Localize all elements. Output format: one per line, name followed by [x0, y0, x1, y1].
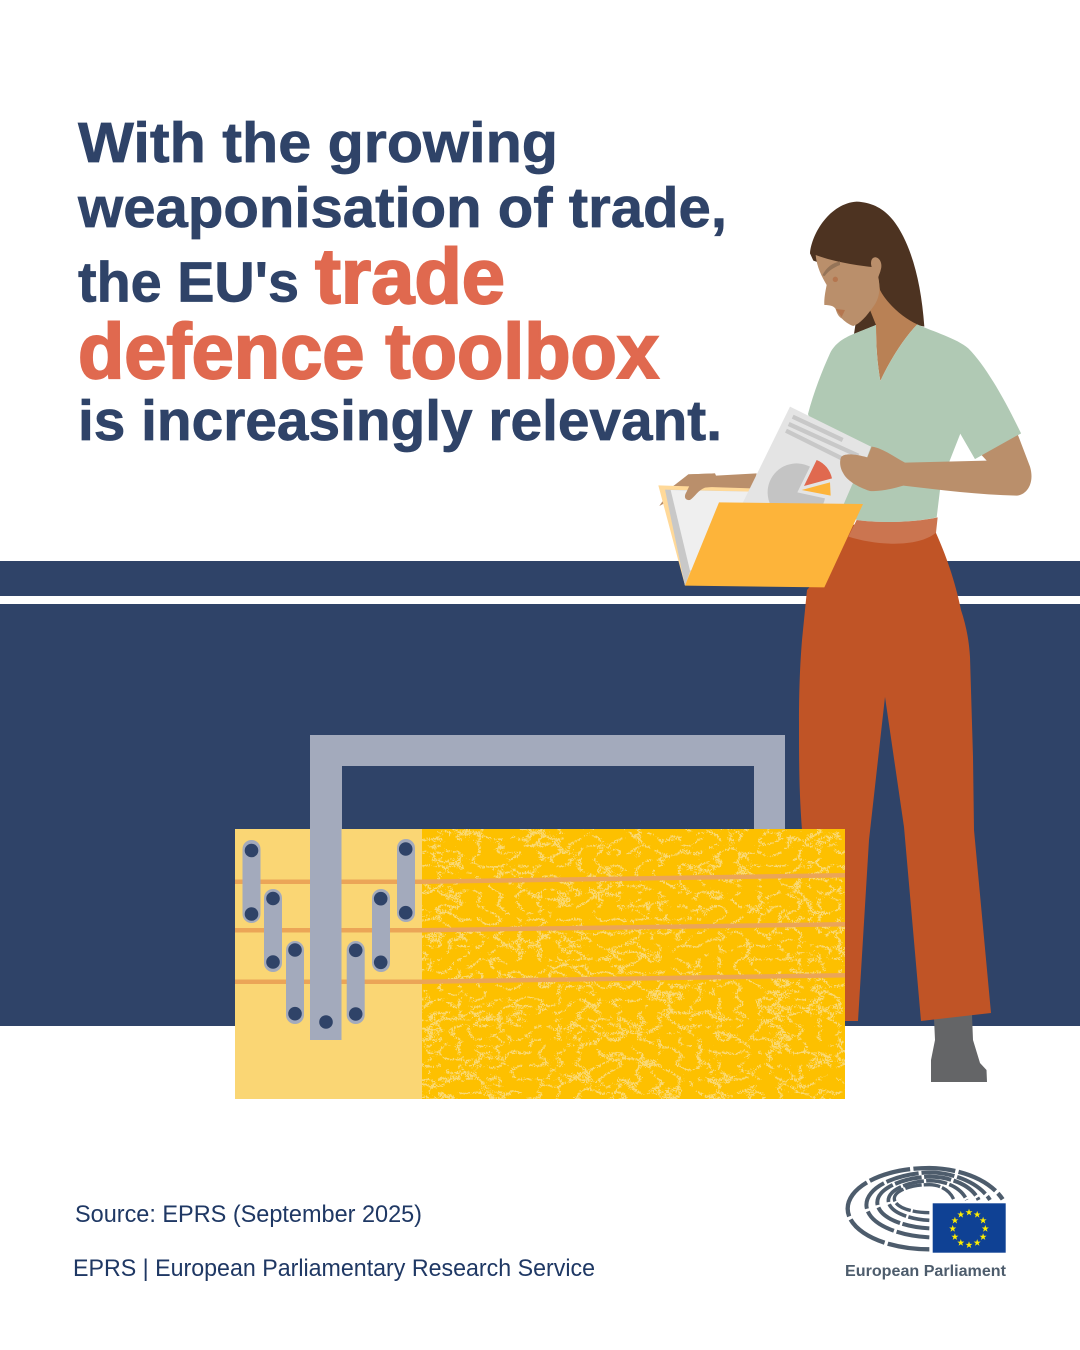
heading: defence toolbox	[78, 307, 659, 395]
heading: is increasingly relevant.	[78, 389, 722, 453]
document text lines	[786, 417, 858, 458]
eyebrow	[822, 261, 840, 276]
heading: weaponisation of trade,	[77, 176, 727, 240]
thumb	[673, 473, 716, 500]
latch bolts	[245, 842, 413, 1029]
boot	[931, 1015, 987, 1082]
eye	[833, 277, 838, 282]
trousers	[799, 520, 991, 1021]
EU flag	[933, 1203, 1006, 1253]
neck	[870, 277, 917, 381]
background bands	[0, 561, 1080, 1026]
source text: Source: EPRS (September 2025)	[75, 1201, 422, 1228]
toolbox left panel	[235, 829, 422, 1099]
logo wordmark: European Parliament	[845, 1263, 1007, 1280]
arm and hand	[840, 432, 1031, 496]
sleeve	[960, 407, 1021, 459]
handle front	[310, 829, 342, 1040]
heading	[77, 111, 727, 453]
face	[816, 255, 881, 326]
folder front	[685, 502, 863, 587]
shirt	[808, 324, 1021, 522]
upper body	[658, 202, 1031, 587]
folder inner stripe	[665, 490, 750, 586]
toolbox textured panel	[422, 829, 845, 1099]
hemicycle	[848, 1168, 1003, 1249]
belt	[848, 517, 938, 544]
person	[658, 202, 1031, 1082]
document	[742, 407, 871, 521]
folder inner sheet	[671, 490, 752, 571]
publisher text: EPRS | European Parliamentary Research Service	[73, 1255, 595, 1282]
latches	[242, 839, 415, 1024]
heading: trade	[315, 232, 505, 320]
heading: the EU's	[78, 250, 299, 314]
pie chart	[768, 460, 832, 521]
toolbox stripes	[235, 873, 845, 984]
folder back	[658, 485, 752, 586]
lips	[836, 309, 845, 317]
logo: European Parliament	[845, 1168, 1007, 1280]
toolbox handle	[310, 735, 785, 1040]
forearm behind folder	[659, 473, 757, 506]
heading: With the growing	[78, 111, 558, 175]
toolbox	[235, 829, 845, 1099]
hair	[810, 202, 924, 334]
